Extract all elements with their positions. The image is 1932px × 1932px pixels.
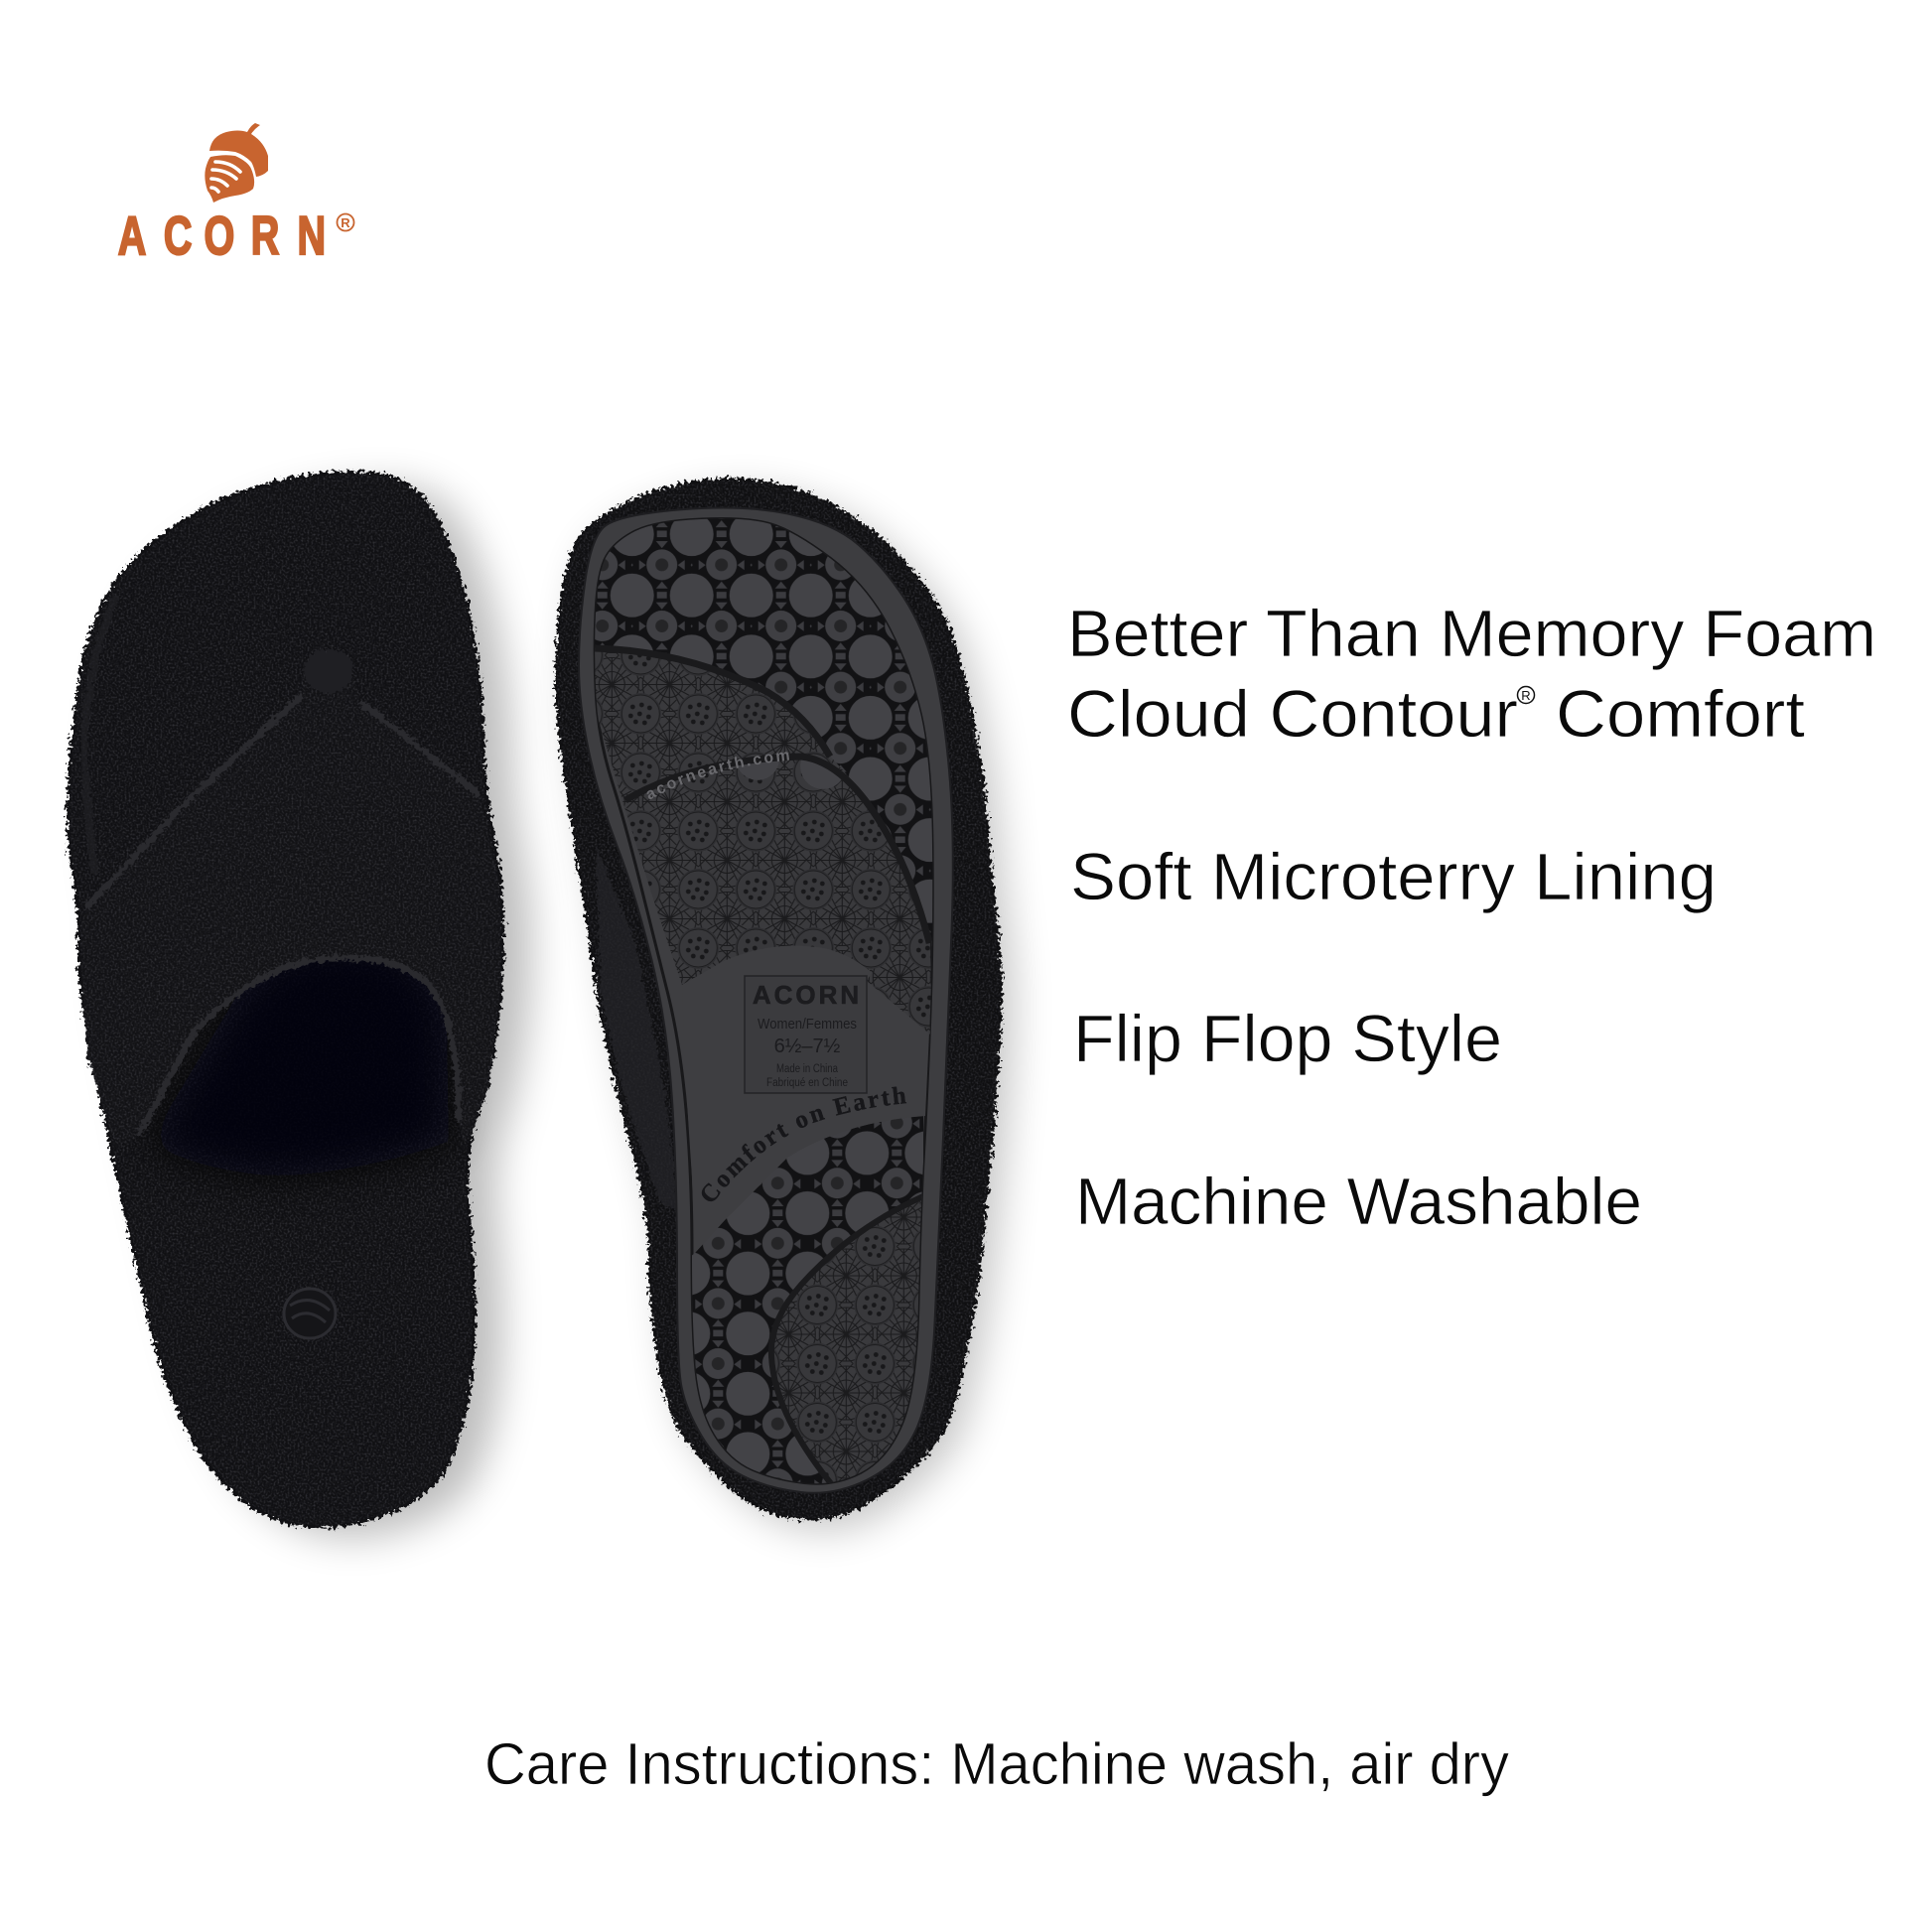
feature: washable: Machine Washable: [1075, 1165, 1642, 1239]
stamp brand: ACORN: [753, 980, 862, 1010]
sole terry texture: [557, 480, 1001, 1518]
sole plain arch: [682, 946, 929, 1253]
sole url lettering: acornearth.com: [647, 752, 789, 800]
size stamp box: [745, 976, 867, 1093]
registered mark small: R: [1521, 688, 1531, 703]
toe grooves: [594, 648, 931, 950]
slipper terry body: [69, 474, 501, 1525]
tread pattern: [586, 496, 943, 1489]
heel circle tread: [685, 1116, 923, 1489]
sole terry upper: [557, 480, 1001, 1518]
strap raised edges: [86, 695, 480, 1135]
heel logo emblem: [284, 1289, 336, 1338]
sole cast shadow: [571, 491, 1015, 1530]
folded strap on the left side: [596, 844, 679, 1211]
stamp size: 6½–7½: [774, 1035, 841, 1057]
stamp origin fr: Fabriqué en Chine: [766, 1077, 848, 1089]
sole slogan lettering: Comfort on Earth: [701, 1086, 907, 1201]
feature list: [1067, 597, 1876, 1239]
outsole rim: [579, 507, 953, 1493]
icon: acorn: [205, 123, 268, 203]
arch mesh tip: [867, 943, 930, 1035]
thong toe post: [304, 649, 353, 693]
feature: cloud contour: [1067, 677, 1805, 752]
footbed seam lines on toe: [83, 596, 117, 874]
toe mesh tread: [591, 648, 933, 1037]
slipper: top view: [69, 474, 531, 1537]
feature: lining: Soft Microterry Lining: [1070, 840, 1717, 914]
thong strap: [79, 649, 501, 1152]
stamp origin en: Made in China: [776, 1063, 839, 1075]
registered mark: R: [341, 215, 350, 230]
slipper cast shadow: [99, 485, 531, 1537]
slipper: sole view: [552, 474, 1033, 1548]
foot opening shadow: [149, 943, 449, 1176]
registered mark: [338, 214, 353, 230]
outsole face: [595, 519, 932, 1483]
heel mesh tread: [771, 1198, 923, 1489]
feature: memory foam: Better Than Memory Foam: [1067, 597, 1876, 671]
toe circle tread: [595, 518, 933, 945]
phrase: comfort: Comfort: [1556, 677, 1805, 752]
phrase: cloud contour: Cloud Contour: [1067, 677, 1518, 752]
strap texture: [79, 649, 501, 1152]
partial circles below second groove: [739, 760, 842, 789]
wordmark: ACORN: ACORN: [118, 207, 326, 267]
registered mark small: [1517, 687, 1535, 703]
care instructions: Care Instructions: Machine wash, air dry: [484, 1731, 1509, 1797]
slipper terry texture: [69, 474, 501, 1525]
stamp border: [745, 976, 867, 1093]
heel groove: [771, 1196, 923, 1487]
feature: flip flop: Flip Flop Style: [1073, 1002, 1502, 1076]
brand logo: Acorn: [118, 123, 353, 267]
stamp gender: Women/Femmes: [758, 1016, 857, 1033]
